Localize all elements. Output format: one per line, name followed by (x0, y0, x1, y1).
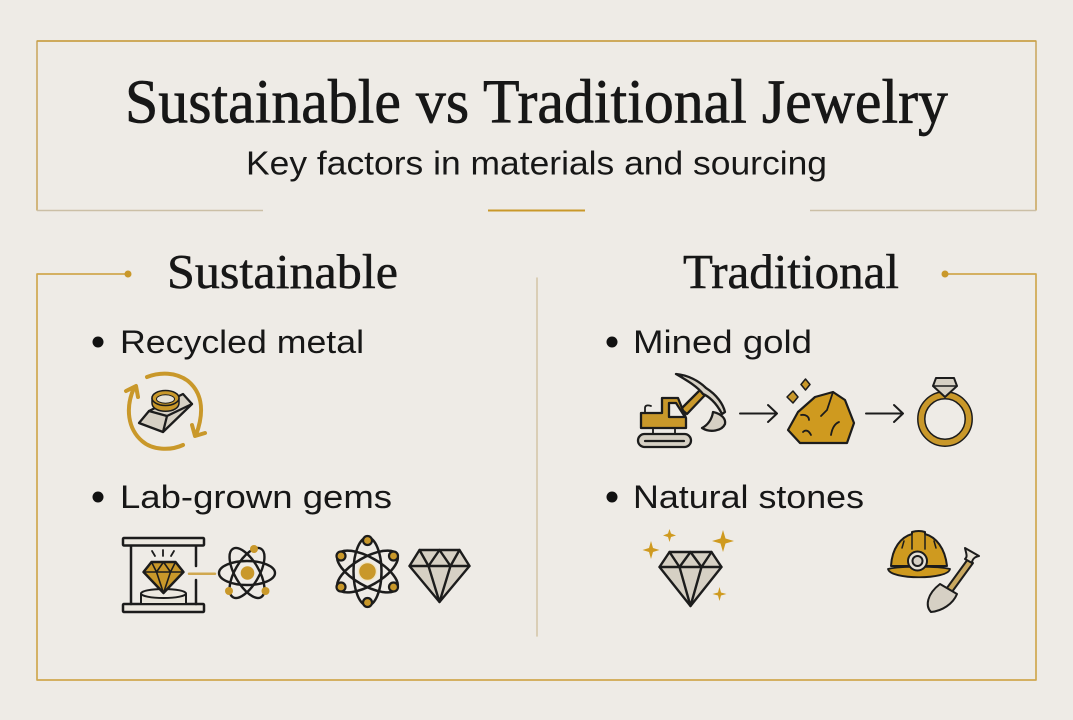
header frame (37, 41, 1036, 210)
icon: excavator (638, 374, 725, 447)
list item: Lab-grown gems: Lab-grown gems (120, 479, 392, 515)
lower frame (37, 270, 1036, 680)
arrow: excavator to rock (740, 405, 777, 422)
icon: natural diamond with sparkles (642, 529, 734, 606)
icon: recycled metal ingot with ring (126, 374, 205, 449)
connector line (189, 572, 215, 575)
icon: lab press with diamond (123, 538, 204, 612)
column divider (536, 278, 538, 636)
heading: Sustainable: Sustainable (167, 244, 398, 299)
heading: Traditional: Traditional (683, 244, 899, 299)
icon: hard hat with lamp (888, 531, 950, 577)
icon: diamond ring (921, 378, 969, 443)
subtitle: Key factors in materials and sourcing (246, 144, 827, 182)
list item: Natural stones: Natural stones (633, 479, 864, 515)
icon: gold nugget (787, 379, 854, 443)
icon: shovel (928, 548, 979, 612)
icon: diamond (410, 550, 470, 602)
list item: Recycled metal: Recycled metal (120, 324, 364, 360)
list item: Mined gold: Mined gold (633, 324, 812, 360)
icon: atom (219, 543, 275, 603)
icon: large atom (331, 536, 404, 607)
title: Sustainable vs Traditional Jewelry (125, 68, 948, 136)
arrow: rock to ring (866, 405, 903, 422)
